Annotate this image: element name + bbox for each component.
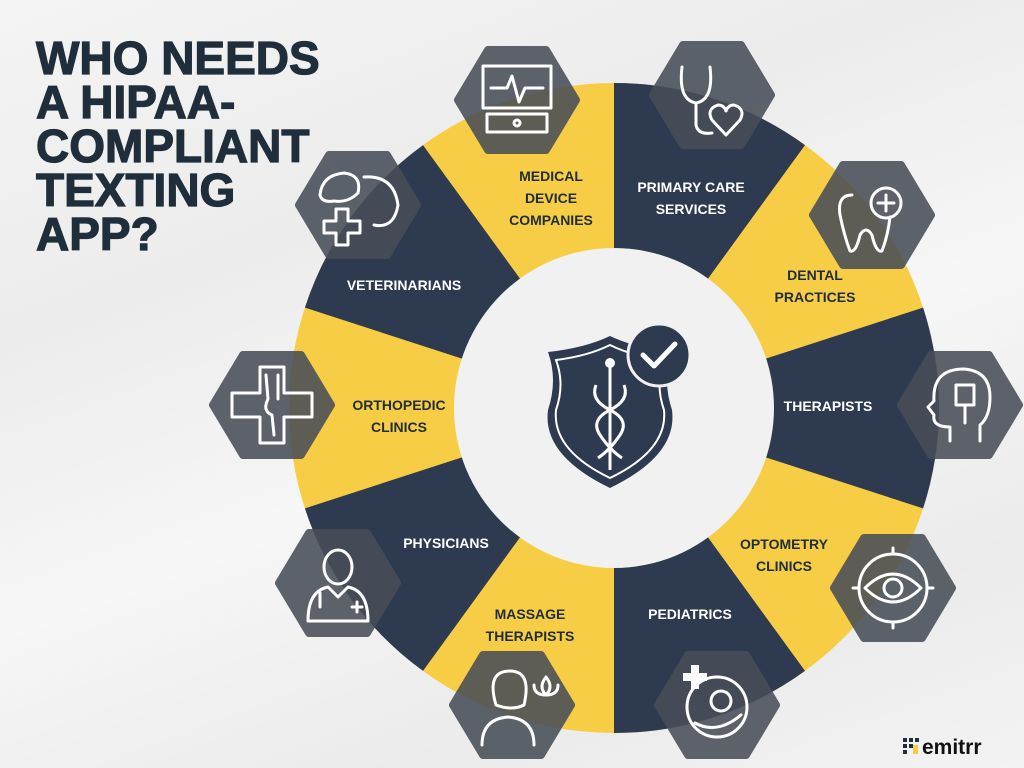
icon hex: dental: [813, 165, 931, 265]
center icon: shield with caduceus and check: [548, 324, 690, 488]
label: orthopedic clinics: ORTHOPEDIC: [352, 397, 446, 413]
icon hex: massage therapists: [453, 655, 571, 755]
label: massage therapists: [486, 606, 574, 644]
label: optometry clinics: OPTOMETRY: [740, 536, 829, 552]
icon hex: physicians: [279, 533, 397, 633]
icon hex: veterinarians: [299, 155, 417, 255]
icon hex: therapists: [901, 355, 1019, 455]
label: dental practices: [775, 267, 855, 305]
title: WHO NEEDS: [36, 32, 320, 84]
label: massage therapists: THERAPISTS: [486, 628, 574, 644]
logo: emitrr: emitrr: [922, 736, 982, 759]
wheel: [289, 83, 939, 733]
label: medical device companies: MEDICAL: [519, 168, 583, 184]
icon hex: medical device: [458, 50, 576, 150]
label: dental practices: DENTAL: [787, 267, 843, 283]
title: A HIPAA-: [36, 76, 235, 128]
label: orthopedic clinics: [352, 397, 446, 435]
label: optometry clinics: CLINICS: [756, 558, 812, 574]
label: medical device companies: COMPANIES: [509, 212, 593, 228]
icon hex: orthopedic: [213, 355, 331, 455]
icon hex: pediatrics: [658, 655, 776, 755]
label: primary care services: [637, 179, 745, 217]
label: dental practices: PRACTICES: [775, 289, 855, 305]
label: medical device companies: [509, 168, 593, 228]
label: veterinarians: VETERINARIANS: [347, 277, 461, 293]
label: primary care services: SERVICES: [656, 201, 726, 217]
icon hex: optometry: [834, 538, 952, 638]
label: primary care services: PRIMARY CARE: [637, 179, 745, 195]
title: TEXTING: [36, 164, 235, 216]
label: massage therapists: MASSAGE: [495, 606, 565, 622]
label: medical device companies: DEVICE: [525, 190, 577, 206]
label: orthopedic clinics: CLINICS: [371, 419, 427, 435]
title: COMPLIANT: [36, 120, 309, 172]
label: optometry clinics: [740, 536, 829, 574]
label: physicians: PHYSICIANS: [403, 535, 489, 551]
title: APP?: [36, 208, 159, 260]
icon hex: primary care (stethoscope heart): [653, 45, 771, 145]
label: therapists: THERAPISTS: [784, 398, 872, 414]
title: [35, 32, 320, 260]
label: pediatrics: PEDIATRICS: [648, 606, 732, 622]
